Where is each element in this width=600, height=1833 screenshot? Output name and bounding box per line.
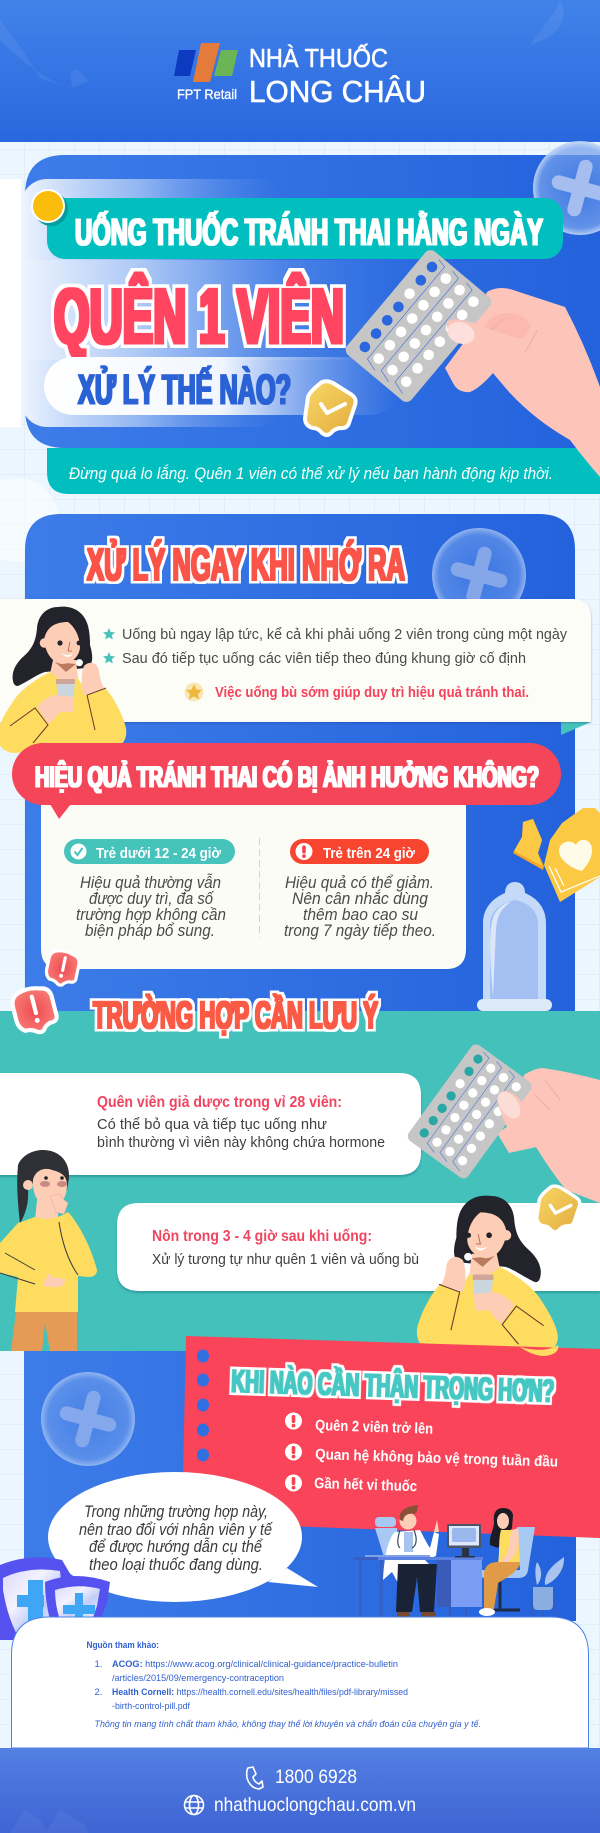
icon: phone: [247, 1767, 263, 1789]
speech bubble: để được hướng dẫn cụ thể: [89, 1537, 263, 1556]
item one: Quên 2 viên trở lên: [315, 1417, 433, 1438]
icon: warning sticker: [45, 949, 80, 987]
icon: star: [184, 682, 204, 702]
item three: Gần hết vỉ thuốc: [314, 1475, 417, 1495]
sources heading: Nguồn tham khảo:: [86, 1640, 159, 1651]
column: under 24 hours: Trẻ dưới 12 - 24 giờ: [96, 845, 221, 862]
title bar: [47, 198, 563, 259]
icon: globe: [184, 1796, 204, 1814]
brand name: LONG CHÂU: [249, 74, 426, 109]
faint background bubble: [0, 478, 59, 562]
icon: shields: [0, 1557, 110, 1640]
column: over 24 hours: Hiệu quả có thể giảm.: [285, 874, 434, 892]
source one: ACOG: https://www.acog.org/clinical/clinical-guidance/practice-bulletin: [112, 1659, 398, 1670]
source two: Health Cornell: https://health.cornell.edu/sites/health/files/pdf-library/missed: [112, 1687, 408, 1698]
question pill: [44, 357, 400, 415]
illustration: doctor consultation: [353, 1505, 564, 1618]
teal strip: [47, 448, 600, 494]
column: under 24 hours: biện pháp bổ sung.: [85, 922, 215, 940]
column: over 24 hours: [284, 839, 436, 940]
speech bubble: Trong những trường hợp này,: [84, 1503, 268, 1521]
illustration: worried woman: [0, 1150, 97, 1351]
white card: effectiveness: [41, 790, 466, 969]
card: vomiting: Xử lý tương tự như quên 1 viên và uống bù: [152, 1251, 419, 1268]
panel: special cases: [0, 983, 600, 1355]
hand: palm: [497, 1068, 600, 1203]
icon: gold dot: [32, 190, 68, 226]
red note: [182, 1336, 600, 1538]
card: placebo pill: Có thể bỏ qua và tiếp tục uống như: [97, 1116, 327, 1133]
card: placebo pill: Quên viên giả dược trong vỉ 28 viên:: [97, 1094, 342, 1111]
panel: sources: [12, 1617, 588, 1748]
column: under 24 hours: được duy trì, đa số: [89, 890, 215, 908]
column: over 24 hours: trong 7 ngày tiếp theo.: [284, 922, 436, 940]
blister pack: [343, 247, 494, 405]
item one: [285, 1412, 433, 1438]
footer: [0, 1748, 600, 1833]
illustration: condom wrapper: [513, 808, 600, 902]
bullet one: Uống bù ngay lập tức, kể cả khi phải uống 2 viên trong cùng một ngày: [122, 626, 567, 643]
icon: plus bubble: [432, 528, 526, 622]
column: over 24 hours: thêm bao cao su: [303, 906, 418, 924]
doctor chair: [375, 1517, 429, 1580]
card: placebo pill: bình thường vì viên này không chứa hormone: [97, 1134, 385, 1151]
panel: when to be careful: [0, 1336, 600, 1640]
disclaimer: Thông tin mang tính chất tham khảo, không thay thế lời khuyên và chẩn đoán của chuyên gia y tế.: [94, 1719, 481, 1730]
source two: -birth-control-pill.pdf: [112, 1701, 190, 1712]
monitor: [447, 1524, 481, 1558]
column: over 24 hours: Trẻ trên 24 giờ: [323, 845, 415, 862]
illustration: condom: [477, 882, 552, 1011]
icon: plus bubble: [41, 1372, 135, 1466]
column: under 24 hours: [64, 839, 235, 940]
question pill: XỬ LÝ THẾ NÀO?: [78, 365, 291, 414]
website: nhathuoclongchau.com.vn: [214, 1794, 416, 1816]
logo: FPT Retail: FPT Retail: [177, 86, 237, 102]
brand name: NHÀ THUỐC: [249, 43, 388, 73]
phone number: 1800 6928: [275, 1766, 357, 1788]
source one: /articles/2015/09/emergency-contraception: [112, 1673, 284, 1684]
column: over 24 hours: Nên cân nhắc dùng: [292, 889, 429, 908]
header: [0, 0, 600, 142]
source one: [94, 1659, 398, 1684]
illustration: woman taking pill: [0, 607, 126, 753]
patient chair: [480, 1527, 535, 1578]
source one: 1.: [94, 1659, 102, 1670]
icon: plus bubble: [533, 141, 600, 235]
column: under 24 hours: trường hợp không cần: [76, 906, 226, 924]
item three: [285, 1474, 417, 1495]
sleeve overlap: [520, 1345, 558, 1356]
speech bubble: [48, 1472, 318, 1602]
fold tab: [561, 722, 591, 735]
panel: hero: [0, 141, 600, 494]
column: under 24 hours: Hiệu quả thường vẫn: [80, 873, 221, 892]
headline: forgot one pill: QUÊN 1 VIÊN: [54, 272, 344, 360]
doctor: [383, 1505, 439, 1617]
speech bubble: theo loại thuốc đang dùng.: [89, 1556, 263, 1574]
hand: thumb: [444, 318, 545, 393]
hand: thumb: [493, 1080, 560, 1160]
white card: [0, 599, 591, 722]
red banner: [12, 743, 561, 819]
brand name: [249, 43, 426, 109]
blister pack: [405, 1042, 534, 1181]
item two: Quan hệ không bảo vệ trong tuần đầu: [315, 1446, 558, 1471]
source two: 2.: [94, 1687, 102, 1698]
teal strip: Đừng quá lo lắng. Quên 1 viên có thể xử lý nếu bạn hành động kịp thời.: [69, 464, 553, 483]
icon: check badge: [537, 1186, 580, 1232]
speech bubble: nên trao đổi với nhân viên y tế: [79, 1521, 274, 1539]
card: placebo pill: [0, 1073, 421, 1175]
heading: TRƯỜNG HỢP CẦN LƯU Ý: [93, 993, 378, 1037]
icon: check badge: [305, 381, 356, 435]
plant: [532, 1557, 564, 1618]
bullet two: Sau đó tiếp tục uống các viên tiếp theo đúng khung giờ cố định: [122, 650, 526, 667]
logo: FPT Retail: [174, 43, 238, 102]
card: vomiting: Nôn trong 3 - 4 giờ sau khi uống:: [152, 1228, 372, 1245]
illustration: woman taking pill: [417, 1196, 558, 1355]
panel: act as soon as remembered: [0, 514, 600, 1011]
hand: palm and fingers: [445, 288, 600, 477]
card: vomiting: [117, 1203, 600, 1291]
patient: [479, 1508, 520, 1616]
source two: [94, 1687, 408, 1712]
key note: Việc uống bù sớm giúp duy trì hiệu quả tránh thai.: [215, 684, 529, 701]
icon: warning sticker: [8, 983, 61, 1038]
desk: [353, 1555, 483, 1618]
